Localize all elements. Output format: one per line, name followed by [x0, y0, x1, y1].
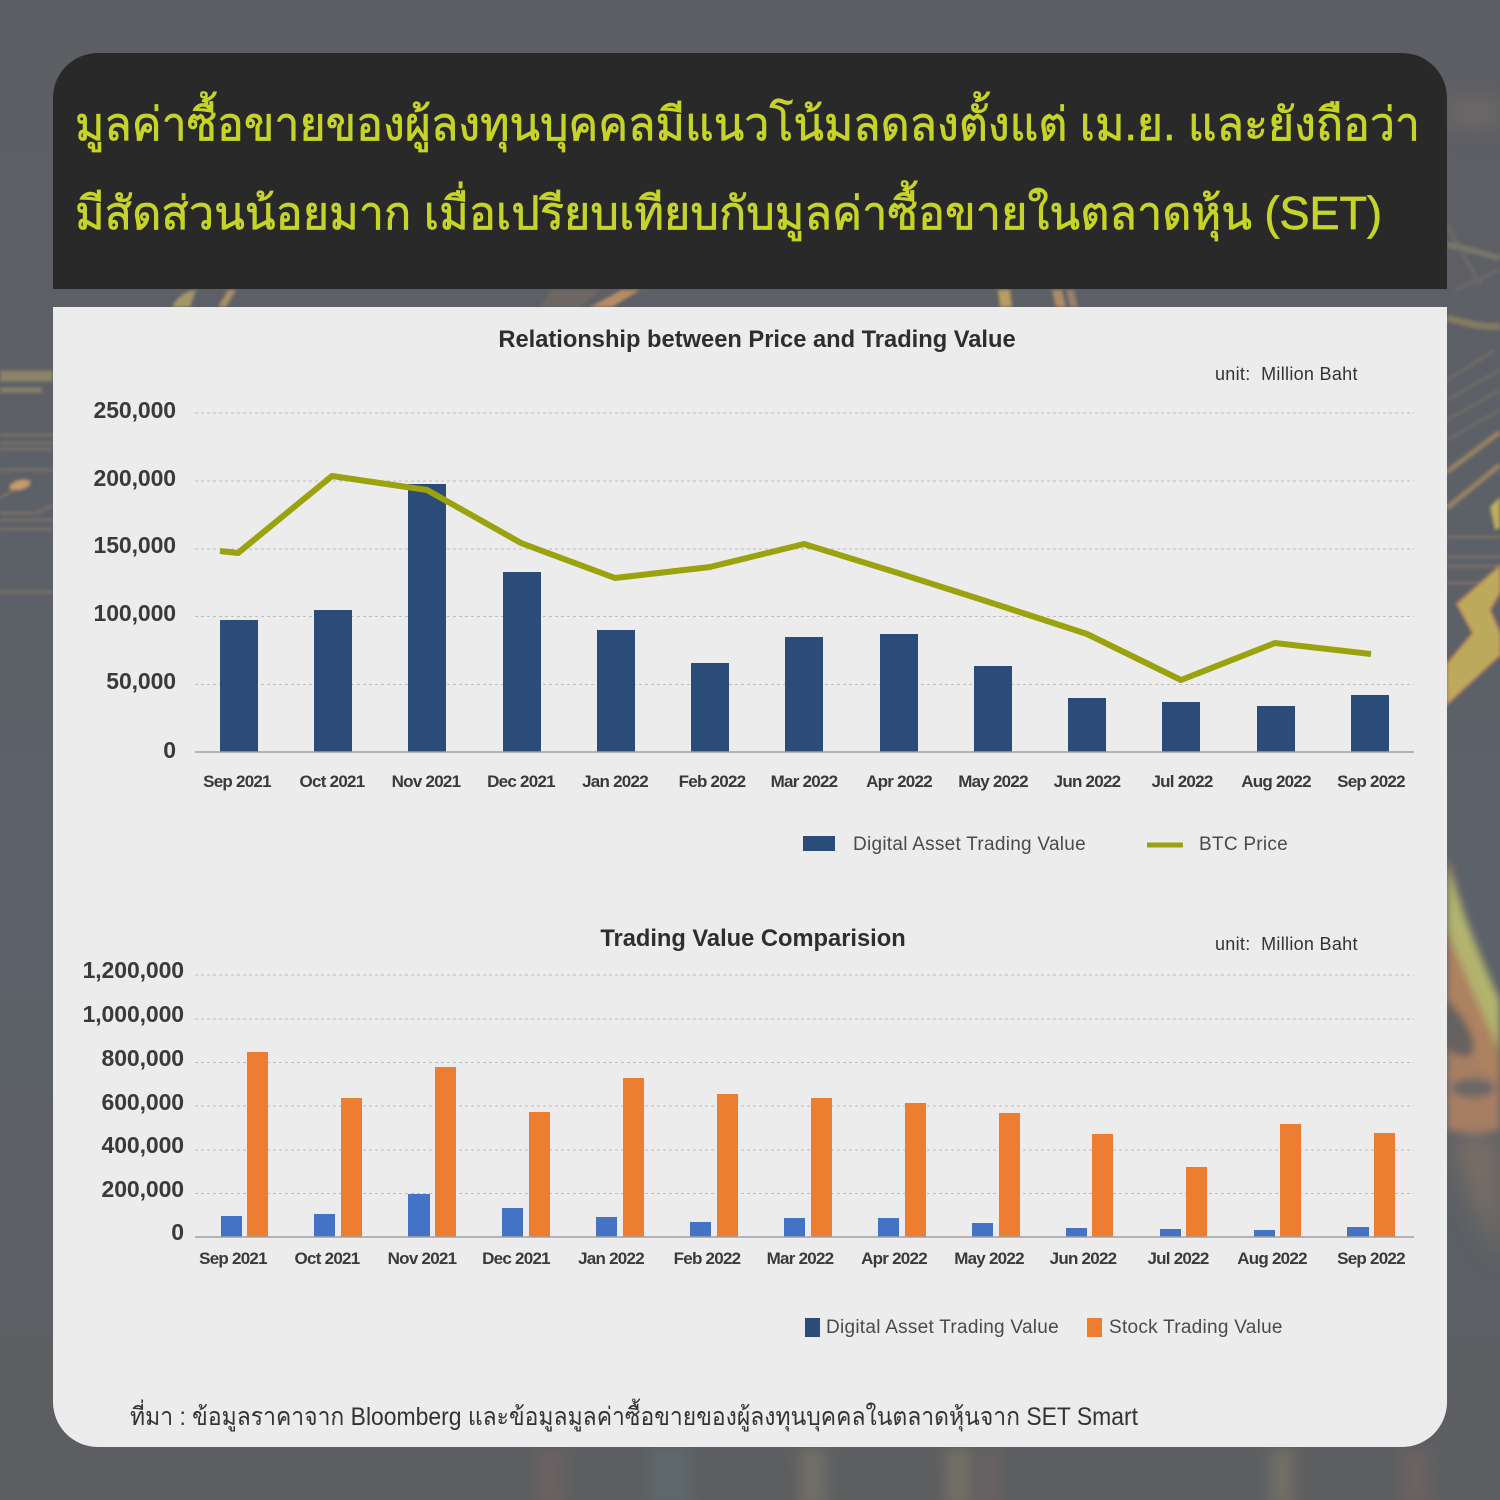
chart 1 y axis labels: 100,000 — [94, 600, 176, 626]
chart 1 x axis labels: Jun 2022 — [1054, 772, 1121, 791]
chart 1 x axis labels: Feb 2022 — [679, 772, 746, 791]
chart 2 x axis labels: Jan 2022 — [578, 1249, 644, 1268]
chart 1 unit: unit: Million Baht — [1215, 364, 1358, 384]
chart 1 legend: Digital Asset Trading Value — [853, 834, 1086, 855]
chart 1 y axis labels: 50,000 — [106, 668, 176, 694]
chart panel — [53, 307, 1447, 1447]
chart 1 x axis labels: Sep 2021 — [203, 772, 271, 791]
decorative pads — [8, 477, 32, 493]
chart 2 y axis labels: 400,000 — [102, 1132, 184, 1158]
chart 2 x axis labels: Sep 2022 — [1337, 1249, 1405, 1268]
top strip streaks — [172, 290, 196, 307]
chart 2 x axis labels: May 2022 — [954, 1249, 1024, 1268]
chart 2 y axis labels — [83, 957, 184, 1245]
chart 2 legend — [805, 1317, 1283, 1338]
header panel — [53, 53, 1447, 289]
chart 1 BTC price line — [220, 476, 1371, 680]
chart 1 heading: Relationship between Price and Trading Value — [498, 327, 1016, 353]
chart 2 legend: Digital Asset Trading Value — [826, 1317, 1059, 1338]
chart 1 x axis labels — [203, 772, 1405, 791]
chart 1 y axis labels: 200,000 — [94, 465, 176, 491]
title — [75, 91, 1420, 242]
chart 2 x axis labels: Feb 2022 — [674, 1249, 741, 1268]
chart 1 y axis labels: 250,000 — [94, 397, 176, 423]
chart 1 x axis labels: Jul 2022 — [1151, 772, 1213, 791]
chart 1 x axis labels: Dec 2021 — [487, 772, 555, 791]
chart 2 x axis labels: Apr 2022 — [861, 1249, 927, 1268]
chart 2 stock bars — [247, 1052, 1395, 1237]
chart 2 x axis labels — [199, 1249, 1405, 1268]
chart 2 x axis labels: Oct 2021 — [295, 1249, 360, 1268]
chart 2 x axis labels: Sep 2021 — [199, 1249, 267, 1268]
chart 1 legend: BTC Price — [1199, 834, 1288, 855]
chart 2 x axis labels: Dec 2021 — [482, 1249, 550, 1268]
chart 1 legend — [803, 834, 1288, 855]
chart 2 unit: unit: Million Baht — [1215, 934, 1358, 954]
chart 1 y axis labels — [94, 397, 176, 763]
source note: ที่มา : ข้อมูลราคาจาก Bloomberg และข้อมูลมูลค่าซื้อขายของผู้ลงทุนบุคคลในตลาดหุ้นจาก SET Smart — [130, 1398, 1138, 1432]
title: มูลค่าซื้อขายของผู้ลงทุนบุคคลมีแนวโน้มลดลงตั้งแต่ เม.ย. และยังถือว่า — [75, 91, 1420, 153]
chart 2 y axis labels: 200,000 — [102, 1176, 184, 1202]
chart 1 y axis labels: 150,000 — [94, 532, 176, 558]
chart 2 y axis labels: 800,000 — [102, 1045, 184, 1071]
chart 1 y axis labels: 0 — [163, 737, 176, 763]
chart 2 x axis labels: Aug 2022 — [1237, 1249, 1307, 1268]
chart 2 x axis labels: Jun 2022 — [1050, 1249, 1117, 1268]
chart 2 x axis labels: Nov 2021 — [388, 1249, 457, 1268]
chart 2 y axis labels: 600,000 — [102, 1089, 184, 1115]
title: มีสัดส่วนน้อยมาก เมื่อเปรียบเทียบกับมูลค่าซื้อขายในตลาดหุ้น (SET) — [75, 180, 1382, 242]
chart 1 x axis labels: Mar 2022 — [771, 772, 838, 791]
chart 1 x axis labels: Nov 2021 — [392, 772, 461, 791]
chart 1: price and trading value — [94, 397, 1414, 791]
chart 2 x axis labels: Jul 2022 — [1147, 1249, 1209, 1268]
chart 1 x axis labels: Jan 2022 — [582, 772, 648, 791]
chart 1 x axis labels: Oct 2021 — [300, 772, 365, 791]
bottom strip streaks — [800, 1447, 1294, 1500]
chart 2 legend: Stock Trading Value — [1109, 1317, 1283, 1338]
chart 1 x axis labels: Apr 2022 — [866, 772, 932, 791]
chart 2 x axis labels: Mar 2022 — [767, 1249, 834, 1268]
chart 1 x axis labels: Aug 2022 — [1241, 772, 1311, 791]
chart 2 y axis labels: 0 — [171, 1219, 184, 1245]
chart 1 bars — [220, 484, 1389, 752]
chart 2 y axis labels: 1,000,000 — [83, 1001, 184, 1027]
chart 2 y axis labels: 1,200,000 — [83, 957, 184, 983]
chart 1 x axis labels: Sep 2022 — [1337, 772, 1405, 791]
chart 1 x axis labels: May 2022 — [958, 772, 1028, 791]
chart 2: trading value comparison — [83, 957, 1414, 1268]
chart 2 digital asset bars — [221, 1194, 1369, 1237]
chart 2 heading: Trading Value Comparision — [600, 926, 906, 952]
